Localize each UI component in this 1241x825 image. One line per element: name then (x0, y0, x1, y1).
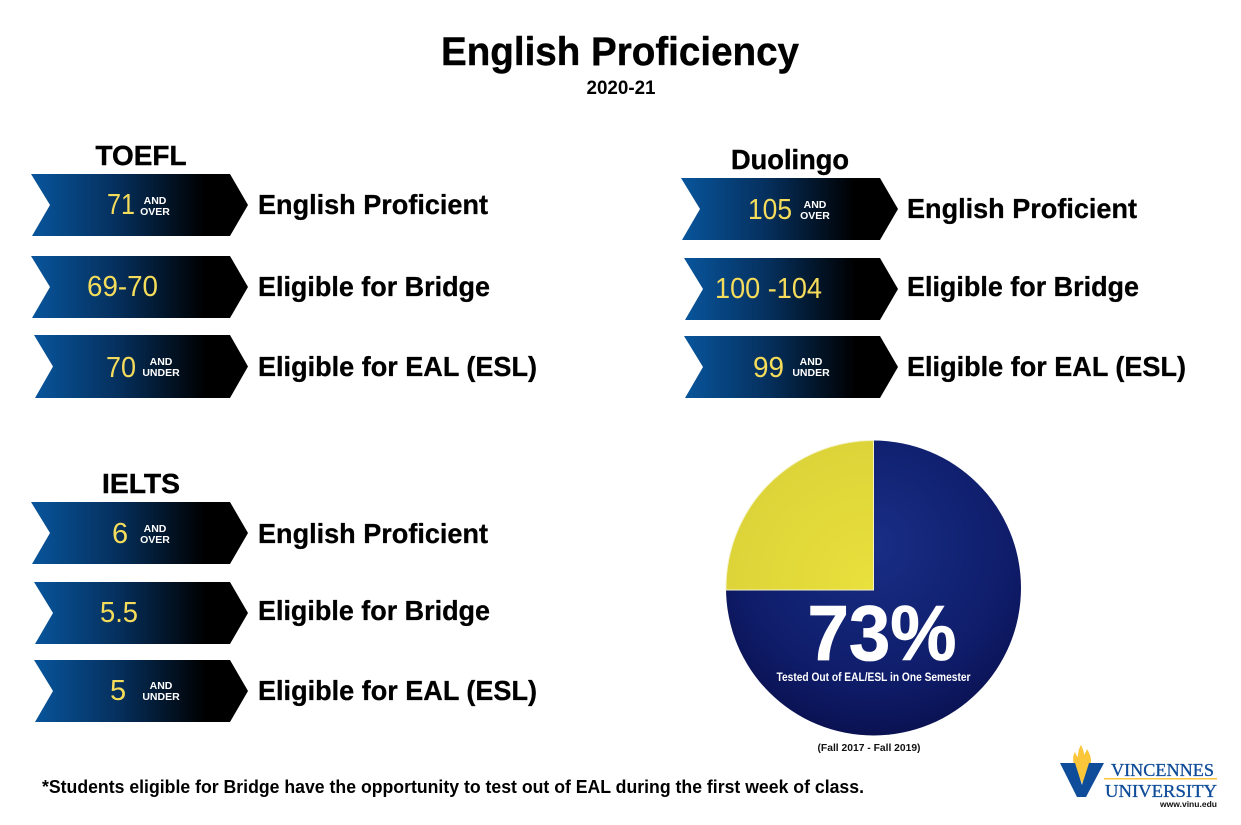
logo name: University: UNIVERSITY (1105, 781, 1217, 801)
row: TOEFL 70 and under: UNDER (142, 367, 180, 379)
subtitle: year: 2020-21 (586, 78, 656, 99)
row: IELTS 5 and under (34, 660, 537, 722)
caption: tested out: Tested Out of EAL/ESL in One Semester (776, 672, 971, 684)
row: Duolingo 105 and over (681, 178, 1137, 240)
slice: navy 73% (726, 440, 1021, 736)
row: TOEFL 70 and under: Eligible for EAL (ESL) (258, 351, 537, 382)
pie chart: 73% (726, 440, 1021, 736)
title: English Proficiency (441, 30, 800, 74)
row: IELTS 5 and under: UNDER (142, 691, 180, 703)
row: Duolingo 99 and under: UNDER (792, 367, 830, 379)
icon: flame (1073, 745, 1091, 785)
heading: Duolingo: Duolingo (731, 144, 849, 175)
logo url: www.vinu.edu (1159, 799, 1217, 809)
row: TOEFL 70 and under: 70 (106, 352, 136, 384)
date range note: (Fall 2017 - Fall 2019) (818, 742, 920, 754)
row: IELTS 5 and under: Eligible for EAL (ESL) (258, 675, 537, 706)
row: TOEFL 69-70 (31, 256, 490, 318)
row: IELTS 6 and over: OVER (140, 534, 170, 546)
row: IELTS 5.5: Eligible for Bridge (258, 595, 490, 626)
row: TOEFL 71 and over (31, 174, 488, 236)
slice: yellow remainder (726, 440, 874, 590)
row: Duolingo 100-104: Eligible for Bridge (907, 271, 1139, 302)
heading: IELTS: IELTS (102, 468, 180, 499)
row: TOEFL 71 and over: English Proficient (258, 189, 488, 220)
row: TOEFL 69-70: Eligible for Bridge (258, 271, 490, 302)
logo divider (1104, 778, 1217, 780)
panel: IELTS (31, 468, 537, 722)
icon: V shield (1060, 763, 1104, 797)
row: TOEFL 71 and over: 71 (107, 189, 135, 221)
row: IELTS 5 and under: 5 (110, 675, 126, 707)
row: Duolingo 99 and under: 99 (753, 352, 784, 384)
row: Duolingo 100-104: 100 -104 (715, 273, 822, 305)
row: IELTS 5 and under: AND (150, 680, 173, 692)
row: IELTS 5.5 (34, 582, 490, 644)
row: Duolingo 99 and under (684, 336, 1186, 398)
row: Duolingo 105 and over: OVER (800, 210, 830, 222)
footnote: *Students eligible for Bridge have the opportunity to test out of EAL during the first week of class. (42, 776, 864, 797)
row: Duolingo 100-104 (684, 258, 1139, 320)
row: Duolingo 105 and over: AND (804, 199, 827, 211)
logo: Vincennes University (1060, 745, 1217, 809)
row: IELTS 5.5: 5.5 (100, 597, 138, 629)
row: Duolingo 99 and under: AND (800, 356, 823, 368)
row: TOEFL 70 and under (34, 335, 537, 398)
row: TOEFL 71 and over: OVER (140, 206, 170, 218)
row: IELTS 6 and over: 6 (112, 518, 128, 550)
row: IELTS 6 and over: AND (144, 523, 167, 535)
row: TOEFL 71 and over: AND (144, 195, 167, 207)
row: Duolingo 105 and over: English Proficient (907, 193, 1137, 224)
row: Duolingo 99 and under: Eligible for EAL (ESL) (907, 351, 1186, 382)
value: 73%: 73% (808, 589, 956, 677)
logo name: Vincennes: VINCENNES (1111, 760, 1214, 780)
row: IELTS 6 and over (31, 502, 488, 564)
panel: TOEFL (31, 140, 537, 398)
row: IELTS 6 and over: English Proficient (258, 518, 488, 549)
heading: TOEFL: TOEFL (96, 140, 186, 171)
panel: Duolingo (681, 144, 1186, 398)
row: TOEFL 70 and under: AND (150, 356, 173, 368)
row: TOEFL 69-70: 69-70 (87, 271, 158, 303)
row: Duolingo 105 and over: 105 (748, 194, 792, 226)
